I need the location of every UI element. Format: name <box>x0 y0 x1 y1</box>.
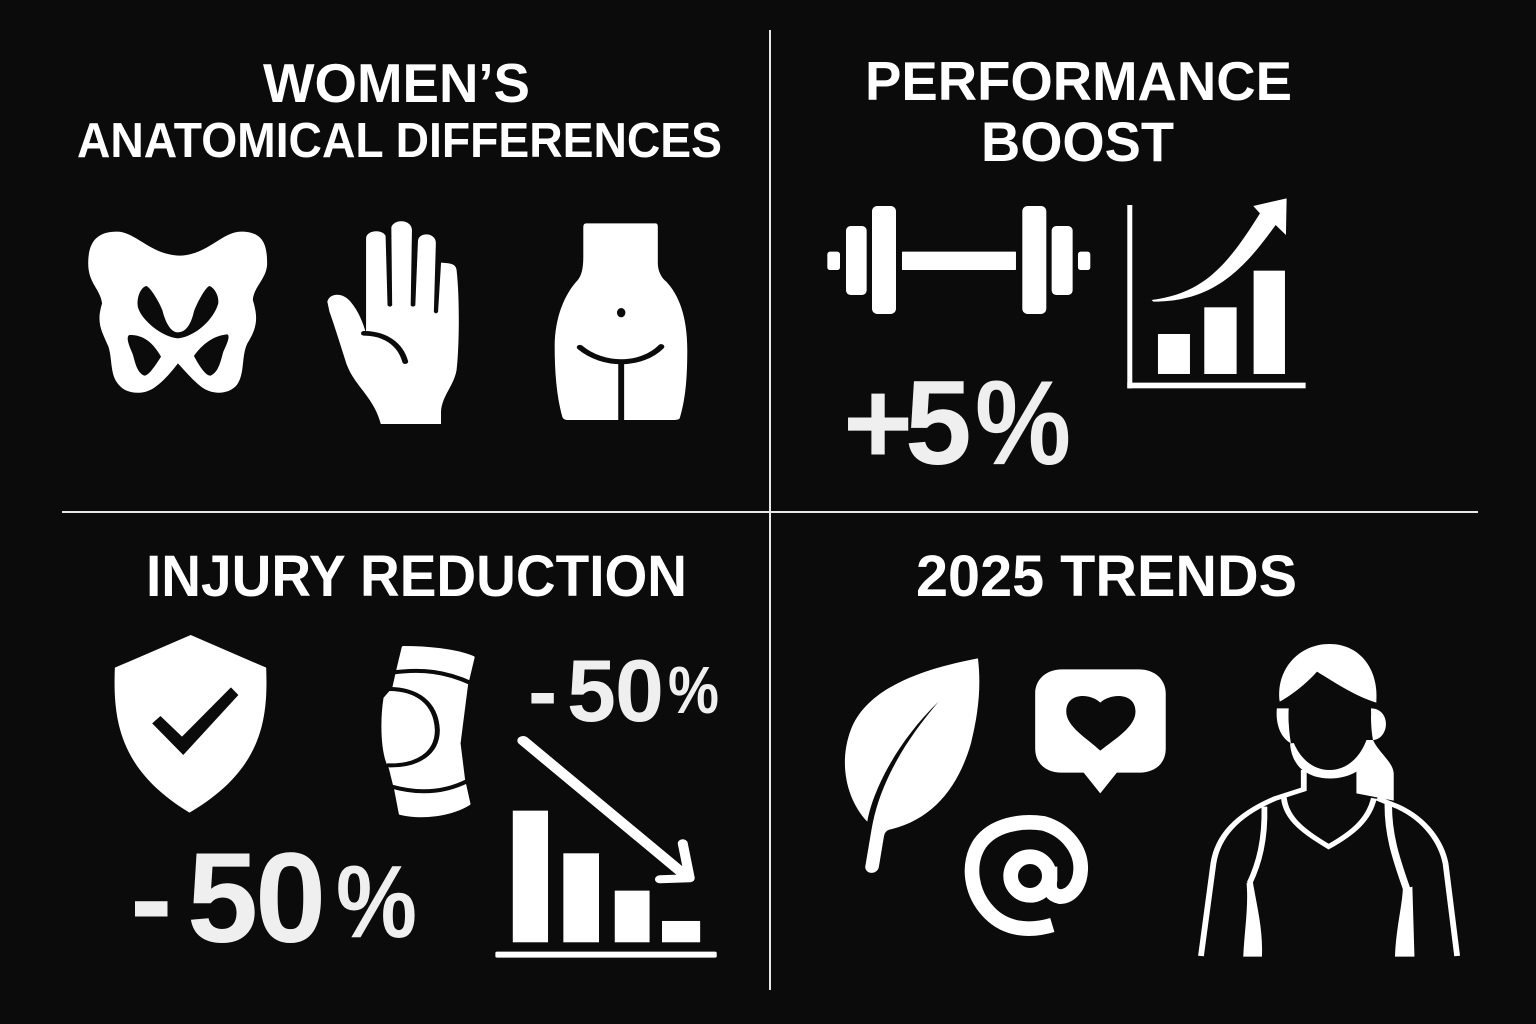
icon: shield with check <box>115 635 266 813</box>
stat: +5%: % <box>975 356 1071 490</box>
heading: injury reduction: INJURY REDUCTION <box>146 544 687 609</box>
heading: women's anatomical differences <box>77 52 722 168</box>
heading: 2025 trends: 2025 TRENDS <box>916 544 1297 609</box>
icon: at sign <box>972 822 1081 929</box>
heading: women's anatomical differences: WOMEN’S <box>263 52 530 114</box>
stat: -50% lower: -50 <box>130 827 326 970</box>
stat: -50% upper: -50 <box>528 641 664 740</box>
icon: female athlete figure <box>1201 644 1457 957</box>
heading: performance boost <box>865 50 1292 173</box>
icon: hand <box>327 221 459 424</box>
stat: -50% lower <box>130 827 417 970</box>
panel: performance boost <box>827 50 1306 490</box>
icon: knee sleeve <box>383 647 473 816</box>
icon: female torso <box>555 223 687 421</box>
icon: heart speech bubble <box>1035 669 1166 793</box>
chart: falling bars <box>495 811 717 958</box>
stat: -50% lower: % <box>336 844 417 959</box>
panel: women's anatomical differences <box>77 52 722 424</box>
arrow: downward trend <box>523 741 690 879</box>
stat: -50% upper: % <box>668 653 719 728</box>
stat: +5% <box>843 356 1071 490</box>
icon: pelvis <box>88 232 267 393</box>
heading: women's anatomical differences: ANATOMICAL DIFFERENCES <box>77 114 722 168</box>
heading: performance boost: PERFORMANCE <box>865 50 1292 112</box>
stat: +5%: +5 <box>843 356 972 490</box>
panel: 2025 trends <box>845 544 1457 957</box>
chart: rising bars with arrow <box>1127 198 1306 388</box>
icon: barbell <box>827 206 1090 314</box>
panel: injury reduction <box>115 544 719 970</box>
heading: performance boost: BOOST <box>981 110 1174 173</box>
icon: leaf <box>845 658 979 873</box>
